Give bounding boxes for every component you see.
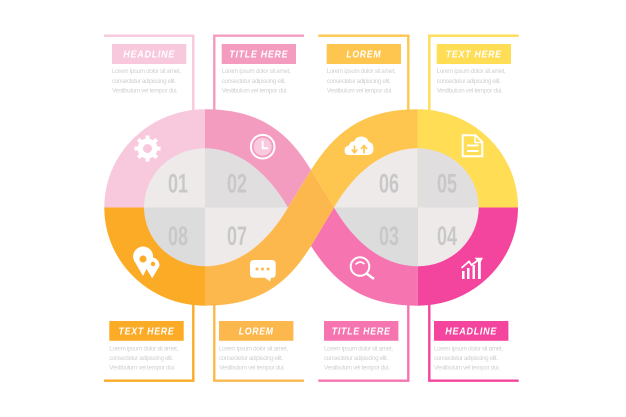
text block: consectetur adipiscing elit. <box>112 78 176 85</box>
text block: Vestibulum vel tempor dui. <box>219 365 285 372</box>
panel: title here bottom <box>318 303 408 381</box>
panel: text here top <box>429 36 519 112</box>
text block: Vestibulum vel tempor dui. <box>327 88 393 95</box>
text block: Vestibulum vel tempor dui. <box>222 88 288 95</box>
label: title here: TITLE HERE <box>332 326 391 338</box>
text block <box>112 68 181 95</box>
text block: Vestibulum vel tempor dui. <box>324 365 390 372</box>
inner quadrant 08 <box>144 208 205 266</box>
text block: Lorem ipsum dolor sit amet, <box>324 345 393 352</box>
inner quadrant 03 <box>334 208 418 266</box>
segment 01 <box>104 109 205 208</box>
number 06: 06 <box>379 168 399 198</box>
text block: Vestibulum vel tempor dui. <box>434 365 500 372</box>
text block: consectetur adipiscing elit. <box>109 355 174 362</box>
number 04: 04 <box>437 221 457 251</box>
label: lorem: LOREM <box>346 50 381 60</box>
segment 07 <box>205 170 334 306</box>
text block: Lorem ipsum dolor sit amet, <box>327 68 396 75</box>
number 03: 03 <box>379 221 399 251</box>
text block <box>109 345 179 372</box>
text block: Lorem ipsum dolor sit amet, <box>437 68 506 75</box>
label: text here: TEXT HERE <box>118 326 174 338</box>
label: lorem: LOREM <box>239 326 274 338</box>
text block <box>219 345 288 372</box>
text block: Lorem ipsum dolor sit amet, <box>219 345 288 352</box>
text block <box>434 345 503 372</box>
icon: location pins <box>133 247 160 278</box>
segment 03 <box>311 208 418 306</box>
infinity diagram <box>104 109 518 306</box>
panel: title here top <box>214 36 304 112</box>
label: headline: HEADLINE <box>445 326 497 338</box>
inner quadrant 04 <box>418 208 479 266</box>
text block: Vestibulum vel tempor dui. <box>109 365 176 372</box>
text block <box>437 68 506 95</box>
text block: Vestibulum vel tempor dui. <box>437 88 503 95</box>
number 07: 07 <box>227 221 247 251</box>
number 02: 02 <box>227 168 247 198</box>
text block <box>327 68 396 95</box>
text block <box>222 68 291 95</box>
icon: clock <box>251 135 274 158</box>
text block: Vestibulum vel tempor dui. <box>112 88 178 95</box>
icon: magnifier <box>351 257 374 279</box>
panel: headline top left <box>104 36 193 112</box>
panel: text here bottom <box>104 303 193 381</box>
panel: lorem bottom <box>214 303 304 381</box>
text block: Lorem ipsum dolor sit amet, <box>222 68 291 75</box>
inner quadrant 01 <box>144 148 205 208</box>
text block: Lorem ipsum dolor sit amet, <box>112 68 181 75</box>
text block: consectetur adipiscing elit. <box>219 355 283 362</box>
inner quadrant 07 <box>205 208 288 266</box>
text block: consectetur adipiscing elit. <box>327 78 391 85</box>
icon: bar chart with arrow <box>462 258 483 279</box>
segment 02 <box>205 109 311 208</box>
segment 06 <box>311 109 418 208</box>
number 01: 01 <box>168 168 188 198</box>
text block <box>324 345 393 372</box>
icon: cloud <box>344 136 374 155</box>
label: text here: TEXT HERE <box>446 50 502 60</box>
number 08: 08 <box>168 221 188 251</box>
label: headline: HEADLINE <box>123 50 175 60</box>
icon: gear <box>134 136 160 162</box>
panel: headline bottom <box>429 303 519 381</box>
text block: consectetur adipiscing elit. <box>437 78 501 85</box>
segment 04 <box>418 208 518 306</box>
number 05: 05 <box>437 168 457 198</box>
inner quadrant 05 <box>418 148 479 208</box>
text block: consectetur adipiscing elit. <box>434 355 498 362</box>
segment 05 <box>418 109 518 208</box>
text block: Lorem ipsum dolor sit amet, <box>434 345 503 352</box>
label: title here: TITLE HERE <box>229 50 288 60</box>
text block: Lorem ipsum dolor sit amet, <box>109 345 179 352</box>
text block: consectetur adipiscing elit. <box>324 355 388 362</box>
text block: consectetur adipiscing elit. <box>222 78 286 85</box>
segment 08 <box>104 208 205 306</box>
icon: document <box>463 135 482 156</box>
icon: chat bubble <box>250 260 276 282</box>
panel: lorem top <box>318 36 408 112</box>
inner quadrant 02 <box>205 148 288 208</box>
inner quadrant 06 <box>334 148 418 208</box>
